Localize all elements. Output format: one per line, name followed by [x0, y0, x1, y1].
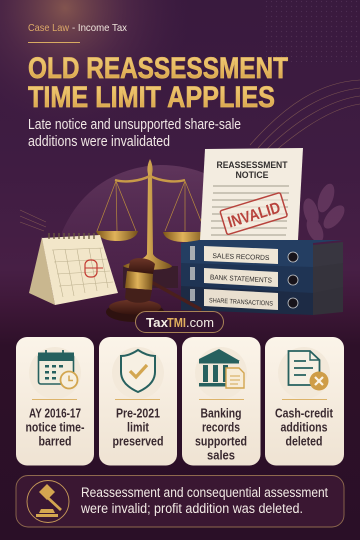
binder: share transactions: SHARE TRANSACTIONS [209, 297, 274, 308]
card: notice time-barred: AY 2016-17 [29, 406, 81, 420]
brand pill: .com [186, 315, 214, 330]
card: cash-credit deleted: Cash-credit [275, 406, 334, 420]
icon: gavel badge [27, 480, 69, 522]
backdrop arc [62, 165, 245, 290]
card: pre-2021 limit: preserved [112, 434, 164, 448]
pole and base [123, 159, 172, 270]
icon: bank and document [195, 347, 247, 399]
notice document: NOTICE [236, 170, 268, 180]
conclusion text: Reassessment and consequential assessment [81, 485, 328, 500]
conclusion text: were invalid; profit addition was deleted. [80, 501, 303, 516]
calendar [29, 233, 118, 305]
binder: share transactions [181, 283, 343, 315]
right pan [163, 181, 207, 242]
card: notice time-barred [16, 337, 94, 466]
gavel [106, 258, 200, 322]
notice document: REASSESSMENT [216, 160, 288, 170]
icon: shield check [112, 347, 164, 399]
title [28, 52, 288, 114]
brand pill: TMI [167, 315, 186, 330]
icon: leaf decoration [301, 182, 348, 245]
brand pill [136, 312, 224, 332]
card: pre-2021 limit: limit [127, 420, 150, 434]
icon: document with cross [278, 347, 330, 399]
title: TIME LIMIT APPLIES [28, 81, 275, 114]
card: notice time-barred: notice time- [26, 420, 84, 434]
card: banking records: sales [207, 448, 235, 462]
conclusion text [80, 485, 328, 516]
subtitle: additions were invalidated [28, 133, 170, 150]
binder: bank statements [181, 262, 343, 293]
beam [115, 176, 185, 181]
scales of justice [96, 159, 207, 288]
card: notice time-barred: barred [38, 434, 72, 448]
title: OLD REASSESSMENT [28, 52, 288, 85]
invalid stamp: INVALID [226, 200, 283, 232]
notice document [200, 148, 303, 240]
binder stack [181, 240, 343, 315]
icon: calendar clock [29, 347, 81, 399]
binder: bank statements: BANK STATEMENTS [210, 274, 272, 285]
card: banking records: Banking [200, 406, 242, 420]
card: pre-2021 limit: Pre-2021 [116, 406, 160, 420]
binder: sales records: SALES RECORDS [212, 253, 270, 262]
left pan [96, 181, 138, 241]
header label [28, 22, 128, 43]
card: cash-credit deleted: deleted [286, 434, 323, 448]
card: cash-credit deleted: additions [280, 420, 328, 434]
card: banking records: supported [195, 434, 247, 448]
card: pre-2021 limit [99, 337, 177, 466]
plinth [123, 266, 178, 288]
conclusion panel [16, 476, 344, 527]
subtitle: Late notice and unsupported share-sale [28, 116, 241, 133]
header label: - Income Tax [72, 22, 128, 34]
card: banking records [182, 337, 260, 466]
brand pill: Tax [146, 315, 169, 330]
header label: Case Law [28, 22, 69, 34]
card: banking records: records [202, 420, 240, 434]
subtitle [28, 116, 241, 150]
card: cash-credit deleted [265, 337, 344, 466]
binder: sales records [181, 240, 343, 267]
